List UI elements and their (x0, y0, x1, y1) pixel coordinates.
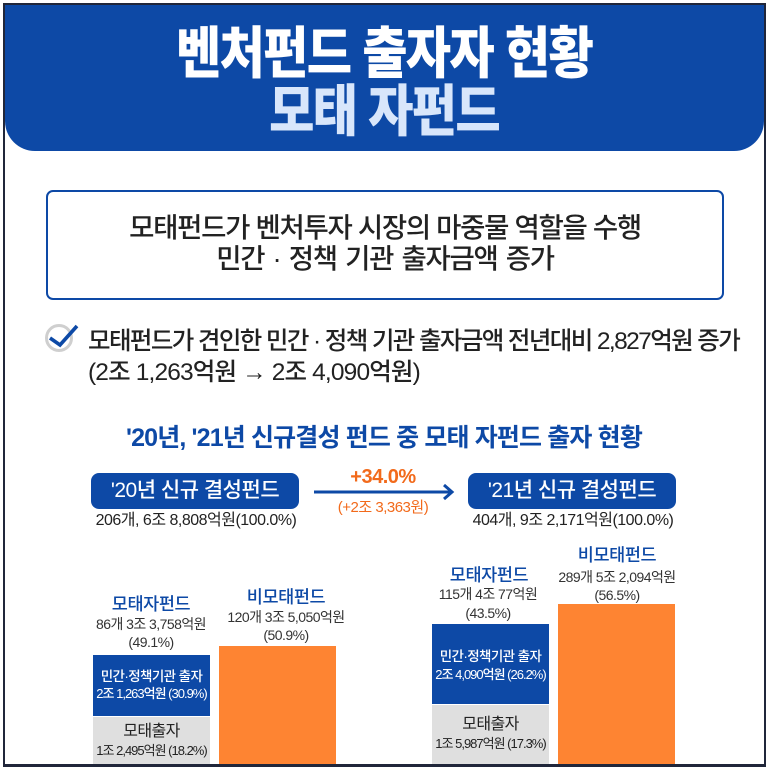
2020 non-mother fund detail (227, 609, 345, 643)
pill: 2020 new funds (91, 473, 299, 509)
2021 non-mother fund detail: (56.5%) (594, 587, 640, 603)
title line 2: 모태 자펀드 (269, 80, 499, 143)
2020 bar: non-mother fund (219, 646, 336, 764)
2021 bar: mother fund investment (432, 705, 549, 764)
2021 total text: 404개, 9조 2,171억원(100.0%) (473, 512, 673, 529)
bullet text line 2: (2조 1,263억원 → 2조 4,090억원) (88, 359, 420, 386)
arrow: growth (314, 484, 454, 500)
chart heading: '20년, '21년 신규결성 펀드 중 모태 자펀드 출자 현황 (126, 424, 642, 452)
callout text line 1: 모태펀드가 벤처투자 시장의 마중물 역할을 수행 (129, 212, 641, 243)
2020 total text: 206개, 6조 8,808억원(100.0%) (96, 512, 296, 529)
2020 mother fund detail: 86개 3조 3,758억원 (96, 616, 206, 632)
growth rate label: +34.0% (350, 466, 416, 488)
2020 non-mother fund detail: 120개 3조 5,050억원 (227, 609, 345, 625)
bullet text line 1: 모태펀드가 견인한 민간 · 정책 기관 출자금액 전년대비 2,827억원 증가 (88, 328, 739, 355)
2020 bar: mother fund investment (93, 717, 210, 764)
header banner (5, 5, 764, 151)
2021 non-mother fund detail: 289개 5조 2,094억원 (558, 569, 676, 585)
2020 bar: private and policy: 2조 1,263억원 (30.9%) (96, 686, 207, 701)
2020 bar: mother fund investment: 1조 2,495억원 (18.2%) (96, 743, 207, 758)
2021 bar: non-mother fund (558, 604, 675, 764)
2021 mother fund label: 모태자펀드 (450, 565, 528, 585)
2021 non-mother fund detail (558, 569, 676, 603)
2021 bar: mother fund investment: 1조 5,987억원 (17.3%) (435, 736, 546, 751)
2021 bar: private and policy (432, 624, 549, 704)
2020 non-mother fund detail: (50.9%) (263, 627, 309, 643)
icon: check mark (45, 324, 78, 352)
2020 non-mother fund label: 비모태펀드 (247, 587, 325, 607)
pill: 2021 new funds (468, 473, 676, 509)
summary callout box (46, 190, 724, 300)
2020 bar: mother fund investment: 모태출자 (123, 723, 180, 740)
2020 bar: private and policy: 민간·정책기관 출자 (101, 669, 202, 684)
2020 mother fund label: 모태자펀드 (112, 594, 190, 614)
2021 mother fund detail (439, 586, 537, 621)
pill: 2020 new funds: '20년 신규 결성펀드 (111, 479, 279, 502)
title line 1: 벤처펀드 출자자 현황 (176, 22, 592, 85)
2020 mother fund detail (96, 616, 206, 650)
2021 bar: mother fund investment: 모태출자 (462, 716, 519, 733)
2020 mother fund detail: (49.1%) (128, 634, 174, 650)
2021 bar: private and policy: 2조 4,090억원 (26.2%) (435, 667, 546, 682)
2021 bar: private and policy: 민간·정책기관 출자 (440, 649, 541, 664)
2021 mother fund detail: (43.5%) (465, 605, 511, 621)
pill: 2021 new funds: '21년 신규 결성펀드 (488, 479, 656, 502)
2021 non-mother fund label: 비모태펀드 (578, 545, 656, 565)
growth amount label: (+2조 3,363원) (338, 499, 428, 516)
callout text line 2: 민간 · 정책 기관 출자금액 증가 (216, 243, 554, 274)
2020 bar: private and policy (93, 655, 210, 716)
2021 mother fund detail: 115개 4조 77억원 (439, 586, 537, 602)
